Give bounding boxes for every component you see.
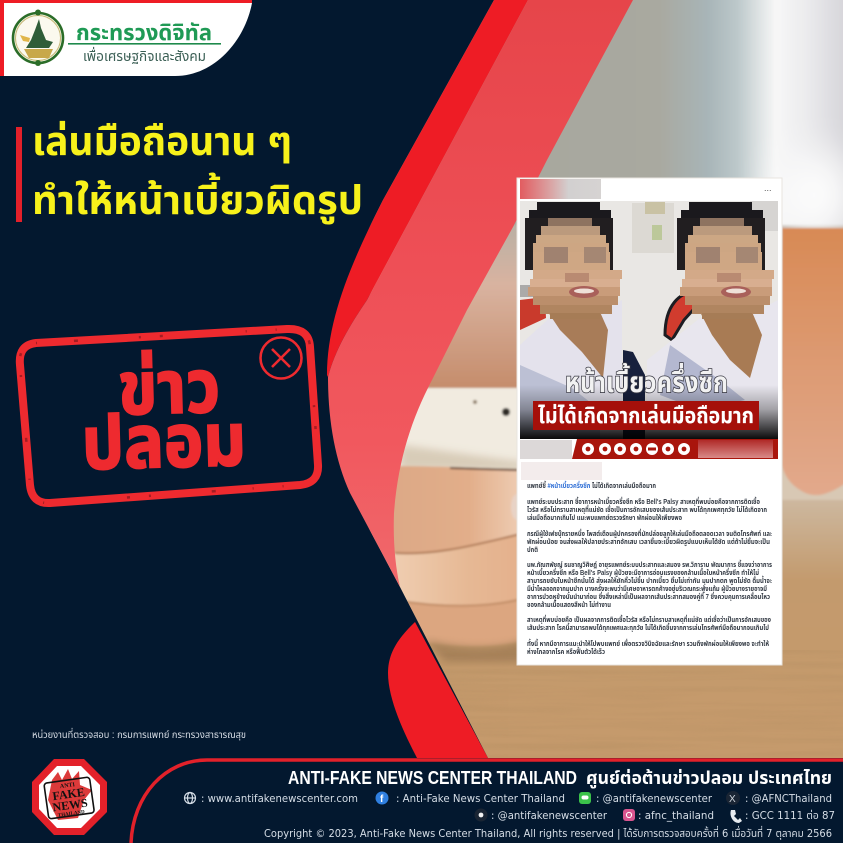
- post body text: สาเหตุที่พบบ่อยคือ เป็นผลจากการติดเชื้อไวรัส หรือไม่ทราบสาเหตุที่แน่ชัด แต่เชื่อว่าเป็นการอักเสบของ: [527, 614, 771, 625]
- post body text: เส้นประสาท โรคนี้สามารถพบได้ทุกเพศและทุกวัย ไม่ได้เกิดขึ้นจากการเล่นโทรศัพท์มือถือมากจนเกินไป: [527, 622, 769, 633]
- post body text: ห่างไกลจากโรค หรือฟื้นตัวได้เร็ว: [527, 646, 605, 656]
- contact row 1: : @AFNCThailand: [745, 792, 832, 805]
- footer heading: [288, 768, 832, 789]
- logo: anti fake news stop sign: FAKE: [52, 785, 86, 803]
- post body text: [527, 480, 772, 656]
- contact row 1: X: [729, 794, 736, 805]
- red swoosh band: [327, 0, 633, 758]
- menu dots: ...: [764, 183, 772, 193]
- post body text: สามารถขยับใบหน้าซีกนั้นได้ ส่งผลให้ยักคิ้วไม่ขึ้น ปากเบี้ยว ยิ้มไม่เท่ากัน มุมปากตก พูดไม่ชัด ดื่มน้ำจะ: [527, 575, 772, 586]
- post body text: ไวรัส หรือไม่ทราบสาเหตุที่แน่ชัด เชื่อเป็นการอักเสบของเส้นประสาท พบได้ทุกเพศทุกวัย ไม่ได้เกิดจาก: [527, 504, 767, 515]
- contact row 2: : @antifakenewscenter: [491, 809, 607, 822]
- contact row 1: [184, 791, 832, 805]
- post body text: ของกล้ามเนื้อแสดงสีหน้า ไม่ทำงาน: [527, 599, 611, 609]
- blurred page name: [521, 462, 602, 480]
- post body text: นพ.ภัณฑพัชญ์ ธนชาญวิศิษฎ์ อายุรแพทย์ระบบประสาทและสมอง รพ.วิภาราม พัฒนาการ ชี้แจงว่าอาการ: [527, 559, 772, 570]
- title: [16, 119, 363, 225]
- post body text: หน้าเบี้ยวครึ่งซีก หรือ Bell's Palsy ผู้ป่วยจะมีอาการอ่อนแรงของกล้ามเนื้อใบหน้าครึ่งซีก ทำให้ไม่: [527, 567, 759, 577]
- post body text: อาการปวดหูข้างนั้นนำมาก่อน ซึ่งสิ่งเหล่านี้เป็นผลจากเส้นประสาทสมองคู่ที่ 7 ซึ่งควบคุมการเคลื่อนไหว: [527, 591, 770, 602]
- logo: anti fake news stop sign: ANTI: [60, 782, 76, 790]
- blurred account name: [520, 179, 601, 199]
- ministry tagline: เพื่อเศรษฐกิจและสังคม: [83, 46, 206, 64]
- logo: anti fake news stop sign: THAILAND: [58, 810, 86, 819]
- post image: [520, 201, 778, 439]
- contact row 2: [474, 808, 835, 823]
- post body text: ปกติ: [527, 547, 538, 554]
- contact row 2: : GCC 1111 ต่อ 87: [745, 809, 835, 822]
- stamp: fake news: ข่าว: [117, 345, 221, 430]
- image subheadline: ไม่ได้เกิดจากเล่นมือถือมาก: [538, 403, 754, 428]
- post body text: แพทย์ชี้ #หน้าเบี้ยวครึ่งซีก ไม่ได้เกิดจากเล่นมือถือมาก: [527, 480, 656, 490]
- post body text: กรณีผู้ใช้เฟซบุ๊กรายหนึ่ง โพสต์เตือนผู้ปกครองที่มักปล่อยลูกให้เล่นมือถือตลอดเวลา จนติดโทรศัพท์ และ: [527, 528, 772, 539]
- post body text: มีน้ำไหลออกจากมุมปาก บางครั้งจะพบว่ามีเศษอาหารตกค้างอยู่บริเวณกระพุ้งแก้ม ผู้ป่วยบางรายอาจมี: [527, 583, 767, 594]
- contact row 1: : www.antifakenewscenter.com: [201, 792, 358, 805]
- image headline: หน้าเบี้ยวครึ่งซีก: [565, 362, 728, 398]
- ministry name: กระทรวงดิจิทัล: [76, 20, 212, 45]
- post body text: ทั้งนี้ หากมีอาการแนะนำให้ไปพบแพทย์ เพื่อตรวจวินิจฉัยและรักษา รวมถึงพักผ่อนให้เพียงพอ จะทำให้: [527, 638, 769, 648]
- logo: anti fake news stop sign: [32, 759, 107, 835]
- title: ทำให้หน้าเบี้ยวผิดรูป: [32, 172, 363, 225]
- stamp: fake news: [20, 329, 318, 503]
- icon: ministry emblem: [13, 10, 63, 66]
- footer heading: ANTI-FAKE NEWS CENTER THAILAND: [288, 768, 577, 788]
- contact row 1: f: [380, 794, 384, 805]
- social post screenshot card: [517, 178, 782, 665]
- contact row 1: : Anti-Fake News Center Thailand: [396, 792, 565, 805]
- background photo: hand holding phone on desk: [370, 0, 843, 770]
- logo: anti fake news stop sign: NEWS: [52, 795, 89, 814]
- image footer bar: [520, 439, 778, 459]
- contact row 1: : @antifakenewscenter: [596, 792, 712, 805]
- stamp: fake news: ปลอม: [81, 398, 247, 485]
- post body text: พักผ่อนน้อย จนส่งผลให้ปลายประสาทอักเสบ เวลายิ้มจะเบี้ยวผิดรูปแบบเห็นได้ชัด แต่ถ้าไม่ยิ้มจะเป็น: [527, 536, 770, 546]
- footer heading: ศูนย์ต่อต้านข่าวปลอม ประเทศไทย: [586, 768, 832, 789]
- ministry logo panel: [0, 0, 252, 76]
- post body text: แพทย์ระบบประสาท ชี้อาการหน้าเบี้ยวครึ่งซีก หรือ Bell's Palsy สาเหตุที่พบบ่อยคือจากการติดเชื้อ: [527, 496, 760, 507]
- footer band: [0, 760, 843, 843]
- contact row 2: : afnc_thailand: [638, 809, 714, 822]
- title: เล่นมือถือนาน ๆ: [32, 119, 292, 164]
- icon: x circle: [260, 338, 302, 378]
- source note: หน่วยงานที่ตรวจสอบ : กรมการแพทย์ กระทรวงสาธารณสุข: [32, 727, 246, 741]
- post body text: เล่นมือถือมากเกินไป แนะพบแพทย์ตรวจรักษา พักผ่อนให้เพียงพอ: [527, 514, 682, 522]
